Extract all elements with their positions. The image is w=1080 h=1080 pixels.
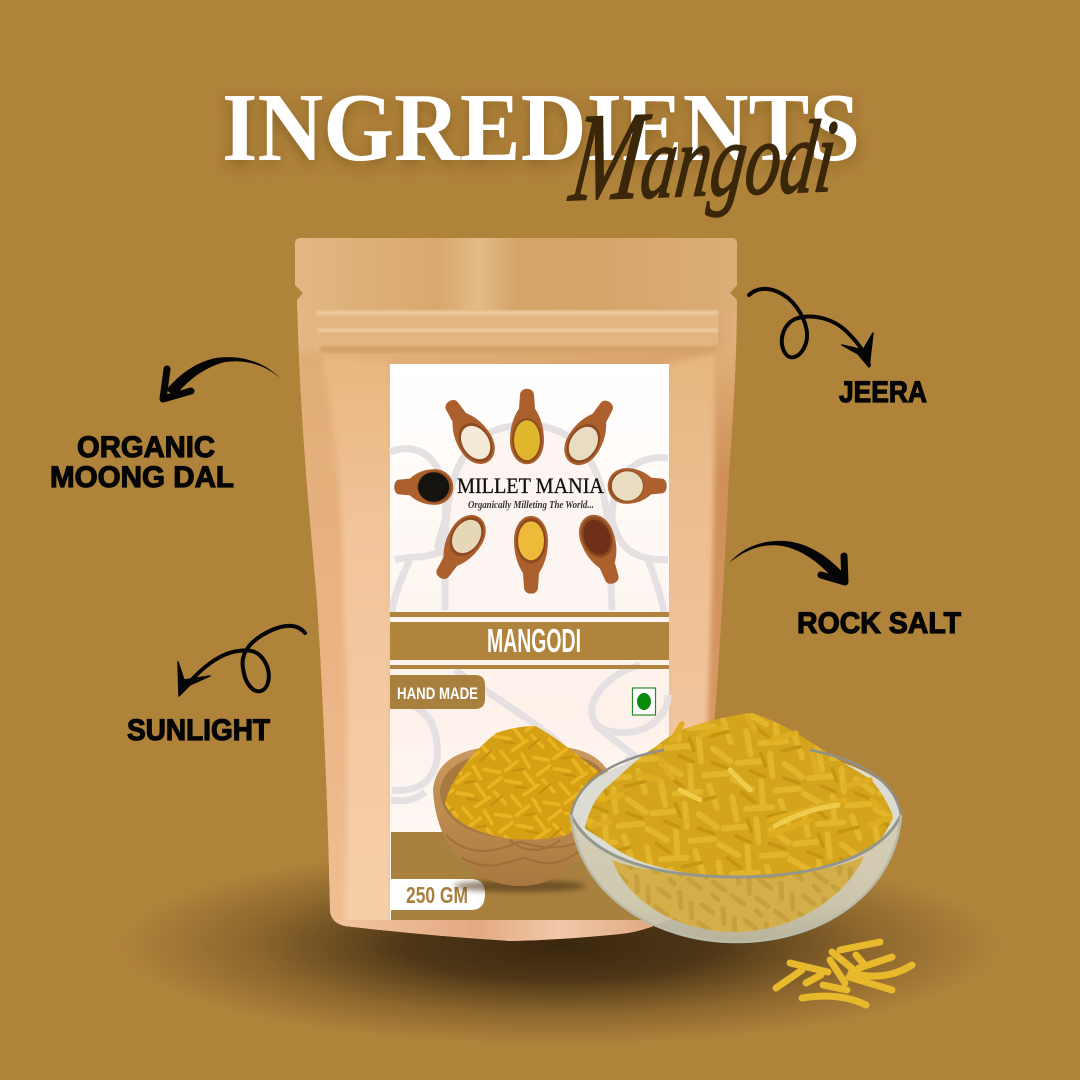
right pouch edge bbox=[704, 344, 736, 722]
label: sunlight: SUNLIGHT bbox=[127, 714, 270, 747]
thin band stripe bottom bbox=[390, 665, 669, 669]
label: moong dal: MOONG DAL bbox=[50, 461, 234, 494]
arrow: jeera bbox=[749, 289, 873, 367]
product name band: MANGODI bbox=[487, 622, 581, 659]
bowl wood grain bbox=[446, 835, 590, 866]
bowl inner rim bbox=[440, 750, 604, 838]
pouch bottom seal bbox=[334, 920, 654, 941]
spoon: right bbox=[608, 468, 667, 504]
table surface bbox=[391, 832, 669, 920]
arrow: sunlight bbox=[178, 626, 305, 696]
glass back rim bbox=[571, 750, 901, 815]
product pouch bbox=[290, 236, 742, 950]
pouch body bbox=[290, 236, 742, 946]
glass bowl back bbox=[572, 747, 900, 877]
callout: organic moong dal bbox=[50, 357, 280, 494]
label background bbox=[390, 364, 669, 920]
left gusset bbox=[322, 356, 392, 950]
label: rock salt: ROCK SALT bbox=[797, 607, 961, 640]
brand tagline: Organically Milleting The World... bbox=[468, 500, 594, 511]
arrow: organic moong dal bbox=[163, 357, 280, 399]
glass front rim bbox=[571, 815, 901, 877]
thin band stripe top bbox=[390, 612, 669, 617]
ground shadow bbox=[120, 845, 1000, 1045]
spoon: left, black millet bbox=[394, 469, 453, 505]
spoon: top right bbox=[557, 393, 624, 472]
callout: jeera bbox=[749, 289, 927, 409]
arrow: rock salt bbox=[729, 541, 846, 583]
hand made badge bbox=[390, 675, 485, 709]
ghost line art of people bbox=[390, 425, 668, 801]
brand name: MILLET MANIA bbox=[457, 473, 604, 498]
pouch zipper bbox=[316, 310, 718, 353]
scattered mangodi bbox=[776, 942, 912, 1005]
wooden bowl mangodi heap bbox=[447, 728, 597, 838]
250 GM badge bbox=[391, 879, 485, 910]
wooden bowl body bbox=[433, 745, 612, 886]
spoon: top centre bbox=[510, 389, 544, 464]
label: organic: ORGANIC bbox=[77, 431, 215, 464]
product name band bbox=[390, 622, 669, 660]
glass bowl body bbox=[571, 815, 901, 942]
wooden bowl with mangodi bbox=[433, 728, 612, 892]
loose sticks on heap edge bbox=[590, 718, 890, 835]
pouch top panel bbox=[290, 236, 742, 310]
spoon: bottom right bbox=[573, 510, 630, 589]
mangodi seen through glass bbox=[612, 856, 864, 932]
mangodi heap bbox=[588, 716, 890, 876]
left gusset outer bbox=[298, 352, 347, 926]
spoon: bottom centre bbox=[514, 516, 548, 594]
highlight sticks bbox=[680, 770, 838, 826]
vegetarian mark bbox=[632, 688, 656, 715]
hand made badge: HAND MADE bbox=[397, 685, 478, 703]
product label bbox=[390, 364, 669, 920]
subtitle: Mangodi script: Mangodi bbox=[563, 80, 845, 228]
right gusset bbox=[668, 354, 715, 737]
250 GM badge: 250 GM bbox=[406, 882, 468, 908]
glass outer edge bbox=[571, 815, 901, 942]
spoon: bottom left bbox=[426, 508, 493, 587]
callout: sunlight bbox=[127, 626, 305, 747]
glass bowl with mangodi bbox=[571, 716, 901, 942]
spoon: top left bbox=[435, 392, 502, 471]
title: INGREDIENTS: INGREDIENTS bbox=[222, 74, 860, 181]
label: jeera: JEERA bbox=[839, 376, 927, 409]
callout: rock salt bbox=[729, 541, 961, 640]
